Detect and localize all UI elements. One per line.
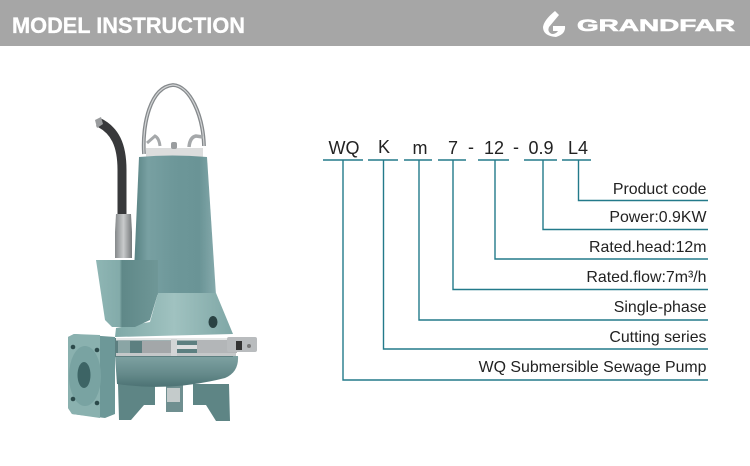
- title: MODEL INSTRUCTION: [12, 13, 245, 38]
- model code letters: 0.9: [528, 138, 554, 158]
- model code letters: m: [412, 138, 428, 158]
- meaning labels: Rated.flow:7m³/h: [586, 269, 706, 286]
- cone bolt hole: [208, 316, 218, 328]
- meaning labels: Cutting series: [609, 329, 707, 346]
- meaning labels: [479, 181, 707, 376]
- meaning labels: WQ Submersible Sewage Pump: [479, 359, 707, 376]
- junction box: [96, 260, 158, 327]
- support legs: [118, 384, 230, 421]
- lower cone housing: [115, 293, 233, 337]
- flange: [68, 334, 115, 418]
- model code letters: [328, 137, 588, 158]
- meaning labels: Single-phase: [614, 299, 707, 316]
- model code letters: -: [513, 137, 519, 157]
- model code letters: WQ: [328, 138, 360, 158]
- brand name: GRANDFAR: [577, 16, 735, 35]
- meaning labels: Power:0.9KW: [609, 209, 706, 226]
- model code letters: K: [378, 137, 390, 157]
- logo: GRANDFAR: [543, 11, 735, 37]
- model code letters: L4: [568, 138, 588, 158]
- model code diagram: [323, 137, 708, 380]
- meaning labels: Product code: [613, 181, 707, 198]
- model code letters: -: [468, 137, 474, 157]
- pump illustration: [68, 85, 257, 421]
- model code letters: 12: [484, 138, 504, 158]
- volute casing: [115, 356, 238, 387]
- handle: [144, 85, 204, 157]
- header bar: [0, 0, 750, 46]
- cable: [98, 122, 122, 214]
- motor housing: [133, 156, 216, 295]
- connector lines: [323, 160, 708, 380]
- clamp band: [115, 337, 257, 357]
- icon: logo mark: [543, 11, 565, 37]
- meaning labels: Rated.head:12m: [589, 239, 706, 256]
- cable connector: [115, 214, 132, 258]
- model code letters: 7: [448, 138, 458, 158]
